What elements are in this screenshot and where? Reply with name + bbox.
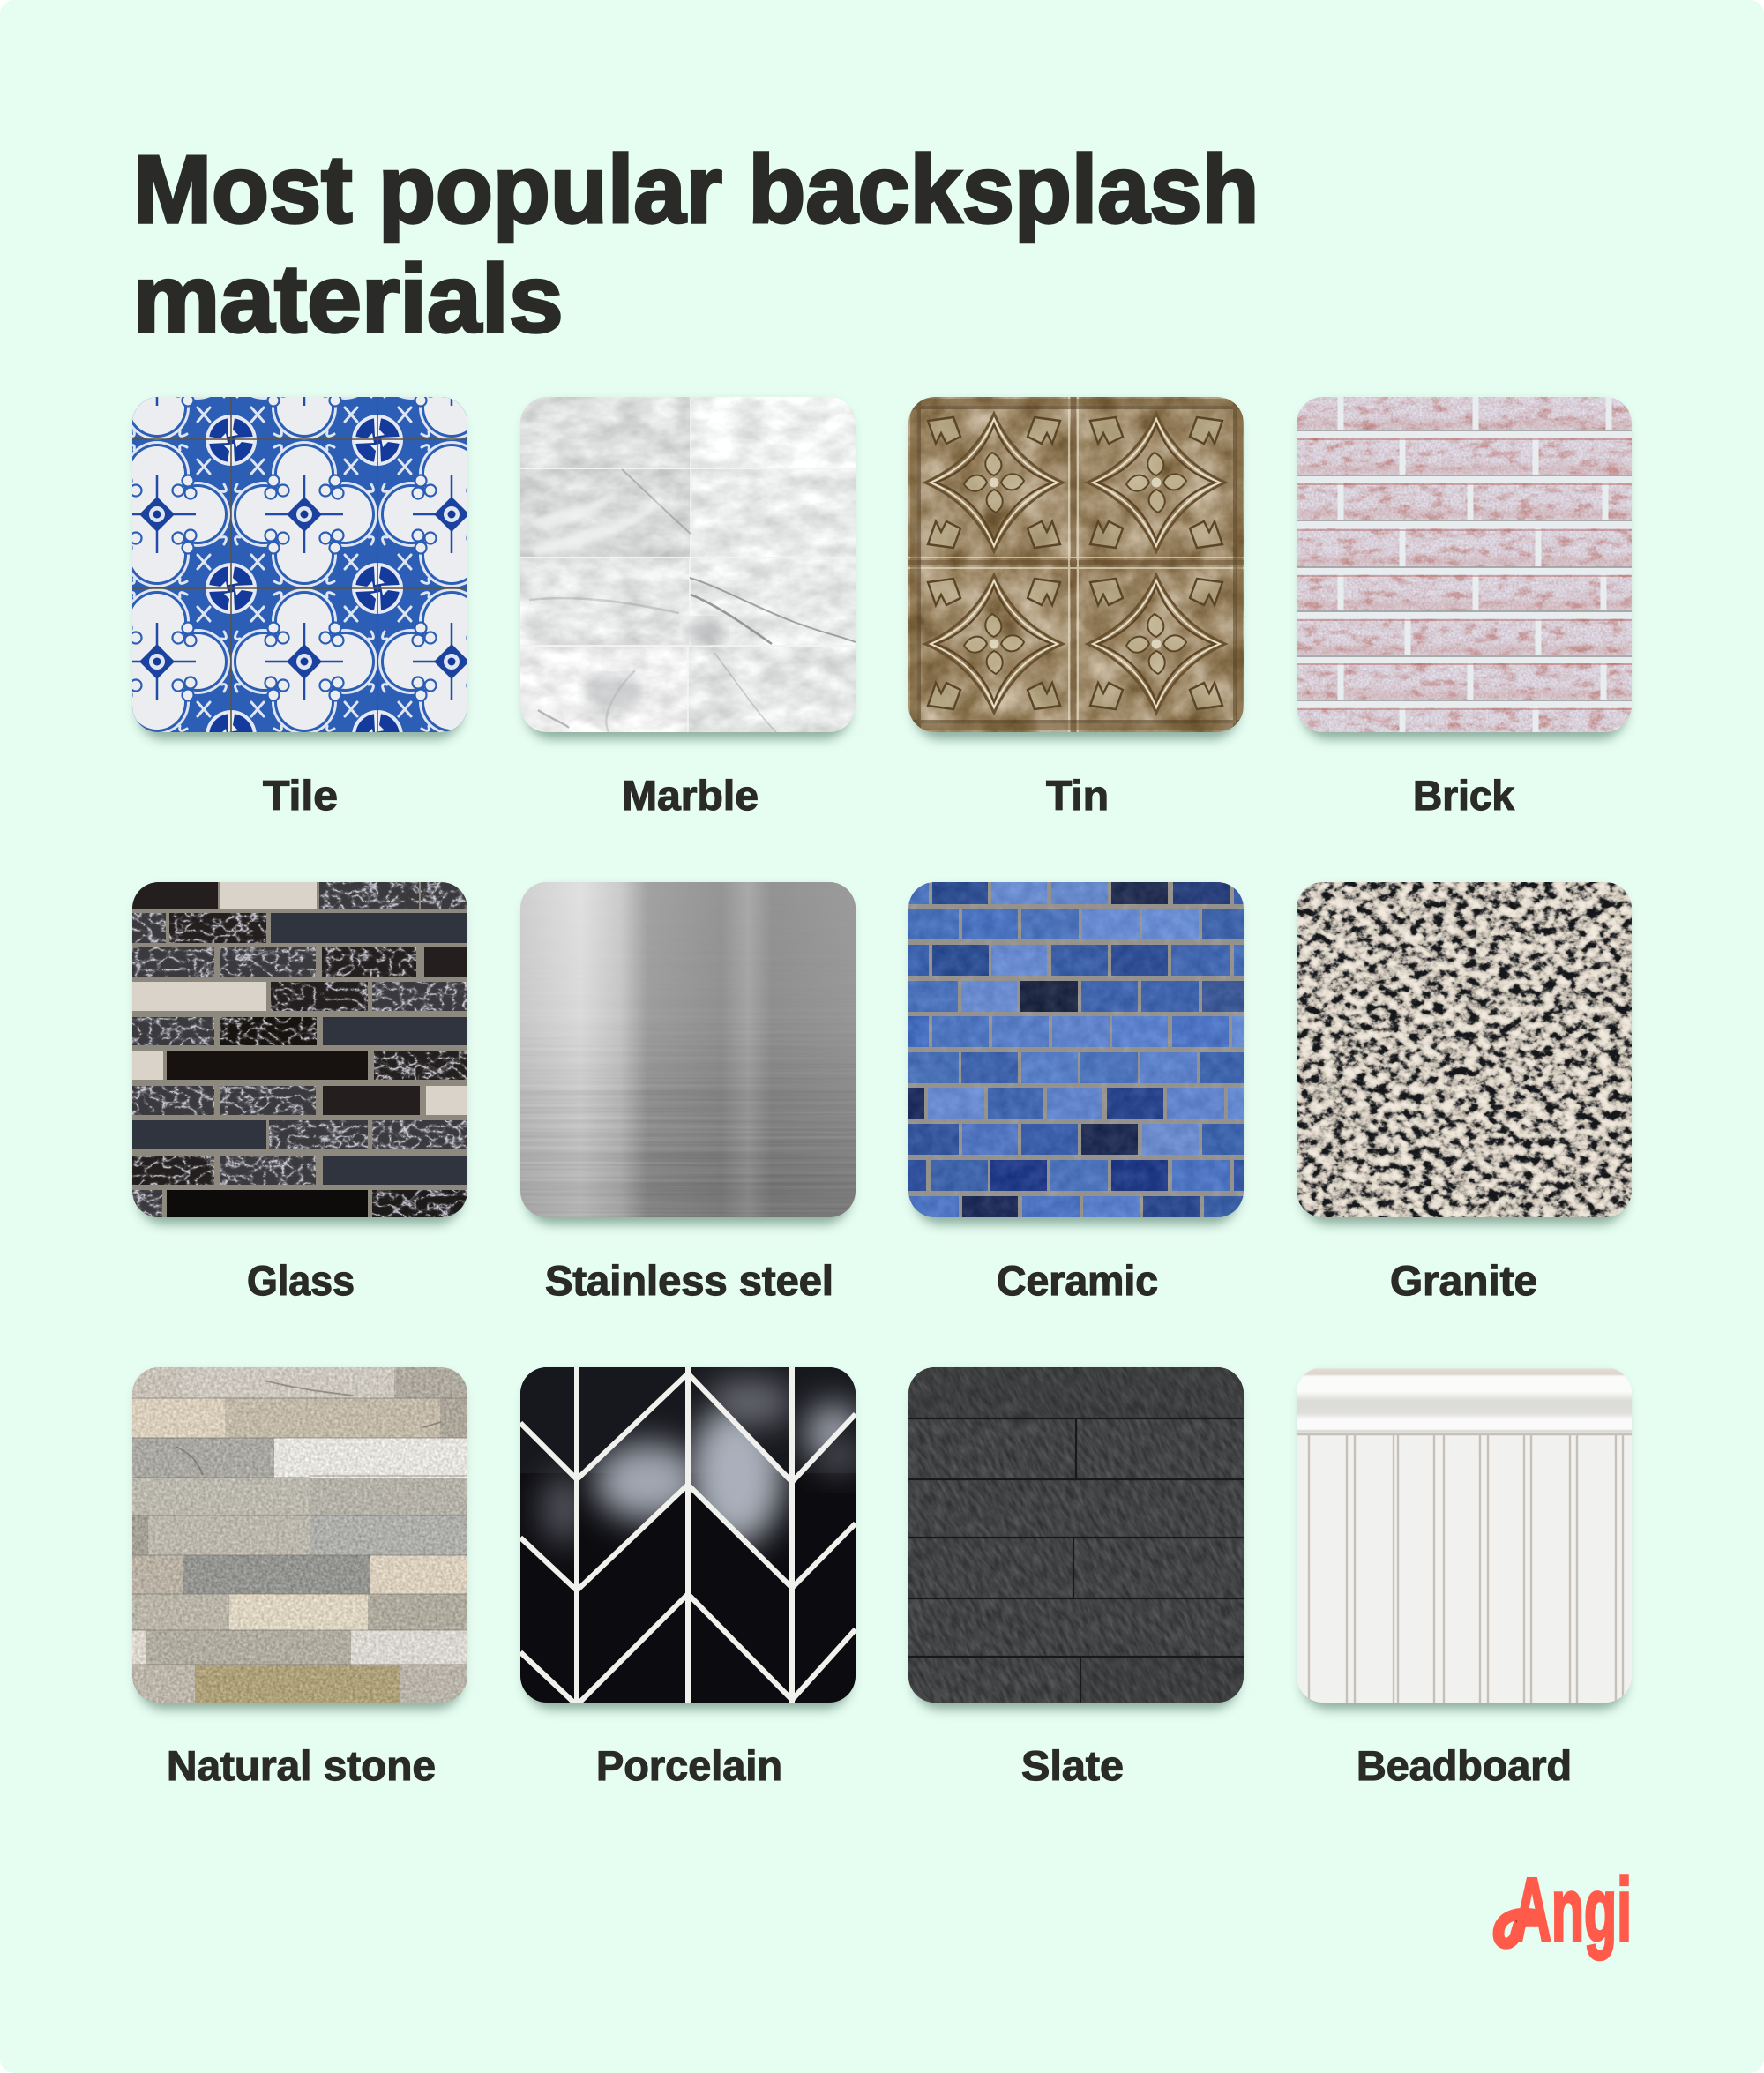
label: Tile: Tile [263,772,338,819]
label: Brick: Brick [1413,772,1515,819]
image: white beadboard [1297,1367,1632,1703]
panel: Porcelain [520,1367,862,1789]
image: whitewashed brick [1297,397,1632,732]
panel: Brick [1297,397,1632,819]
image: speckled granite [1297,882,1632,1217]
label: Tin: Tin [1046,772,1109,819]
label: Porcelain: Porcelain [596,1742,782,1789]
image: pressed tin tiles [908,397,1244,732]
label: Glass: Glass [247,1257,355,1304]
label: Granite: Granite [1390,1257,1537,1304]
panel: Marble [520,397,856,819]
panel: Natural stone [132,1367,467,1789]
label: Marble: Marble [622,772,759,819]
label: Beadboard: Beadboard [1357,1742,1572,1789]
image: blue patterned tile [132,397,467,732]
image: brushed steel [520,882,856,1217]
panel: Stainless steel [520,882,856,1304]
label: Ceramic: Ceramic [997,1257,1158,1304]
panel: Tin [908,397,1244,819]
title: materials [132,245,563,353]
title [132,136,1259,353]
label: Slate: Slate [1021,1742,1124,1789]
panel: Granite [1297,882,1632,1304]
panel: Tile [131,397,469,812]
panel: Ceramic [908,882,1244,1304]
image: dark slate [694,1153,1458,1917]
logo: Angi [1499,1860,1632,1960]
panel: Beadboard [1297,1367,1632,1789]
panel: Glass [132,882,467,1304]
image: white marble slabs [520,397,856,732]
logo: Angi: Angi [1513,1860,1632,1960]
image: black chevron porcelain [520,1367,862,1705]
image: glass mosaic [132,882,467,1217]
panel: Slate [907,1367,1245,1782]
image: stacked stone [132,1367,467,1703]
image: blue ceramic brick tile [908,882,1244,1217]
title: Most popular backsplash [134,136,1259,243]
label: Stainless steel: Stainless steel [545,1257,833,1304]
label: Natural stone: Natural stone [167,1742,436,1789]
